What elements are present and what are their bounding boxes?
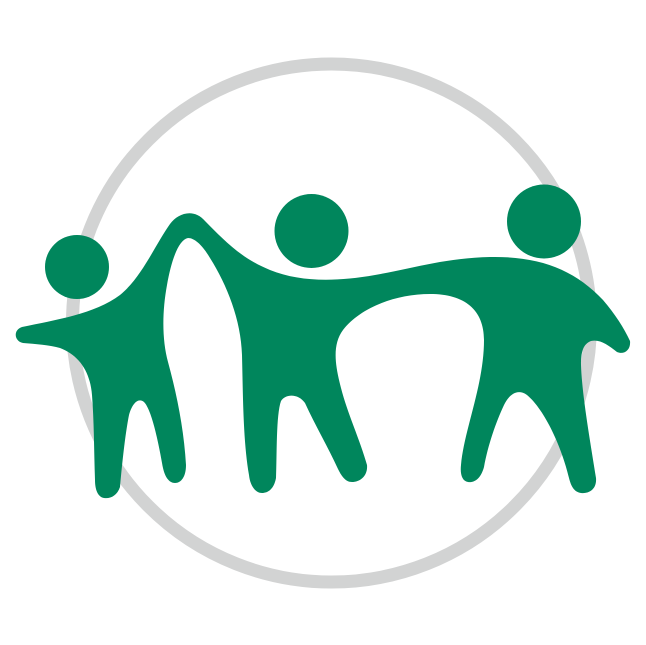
right figure head — [507, 184, 581, 258]
middle figure head — [274, 194, 348, 268]
icon: three joined figures — [16, 184, 630, 498]
left figure head — [45, 235, 109, 299]
joined bodies — [16, 213, 630, 498]
grey ring — [72, 64, 590, 582]
